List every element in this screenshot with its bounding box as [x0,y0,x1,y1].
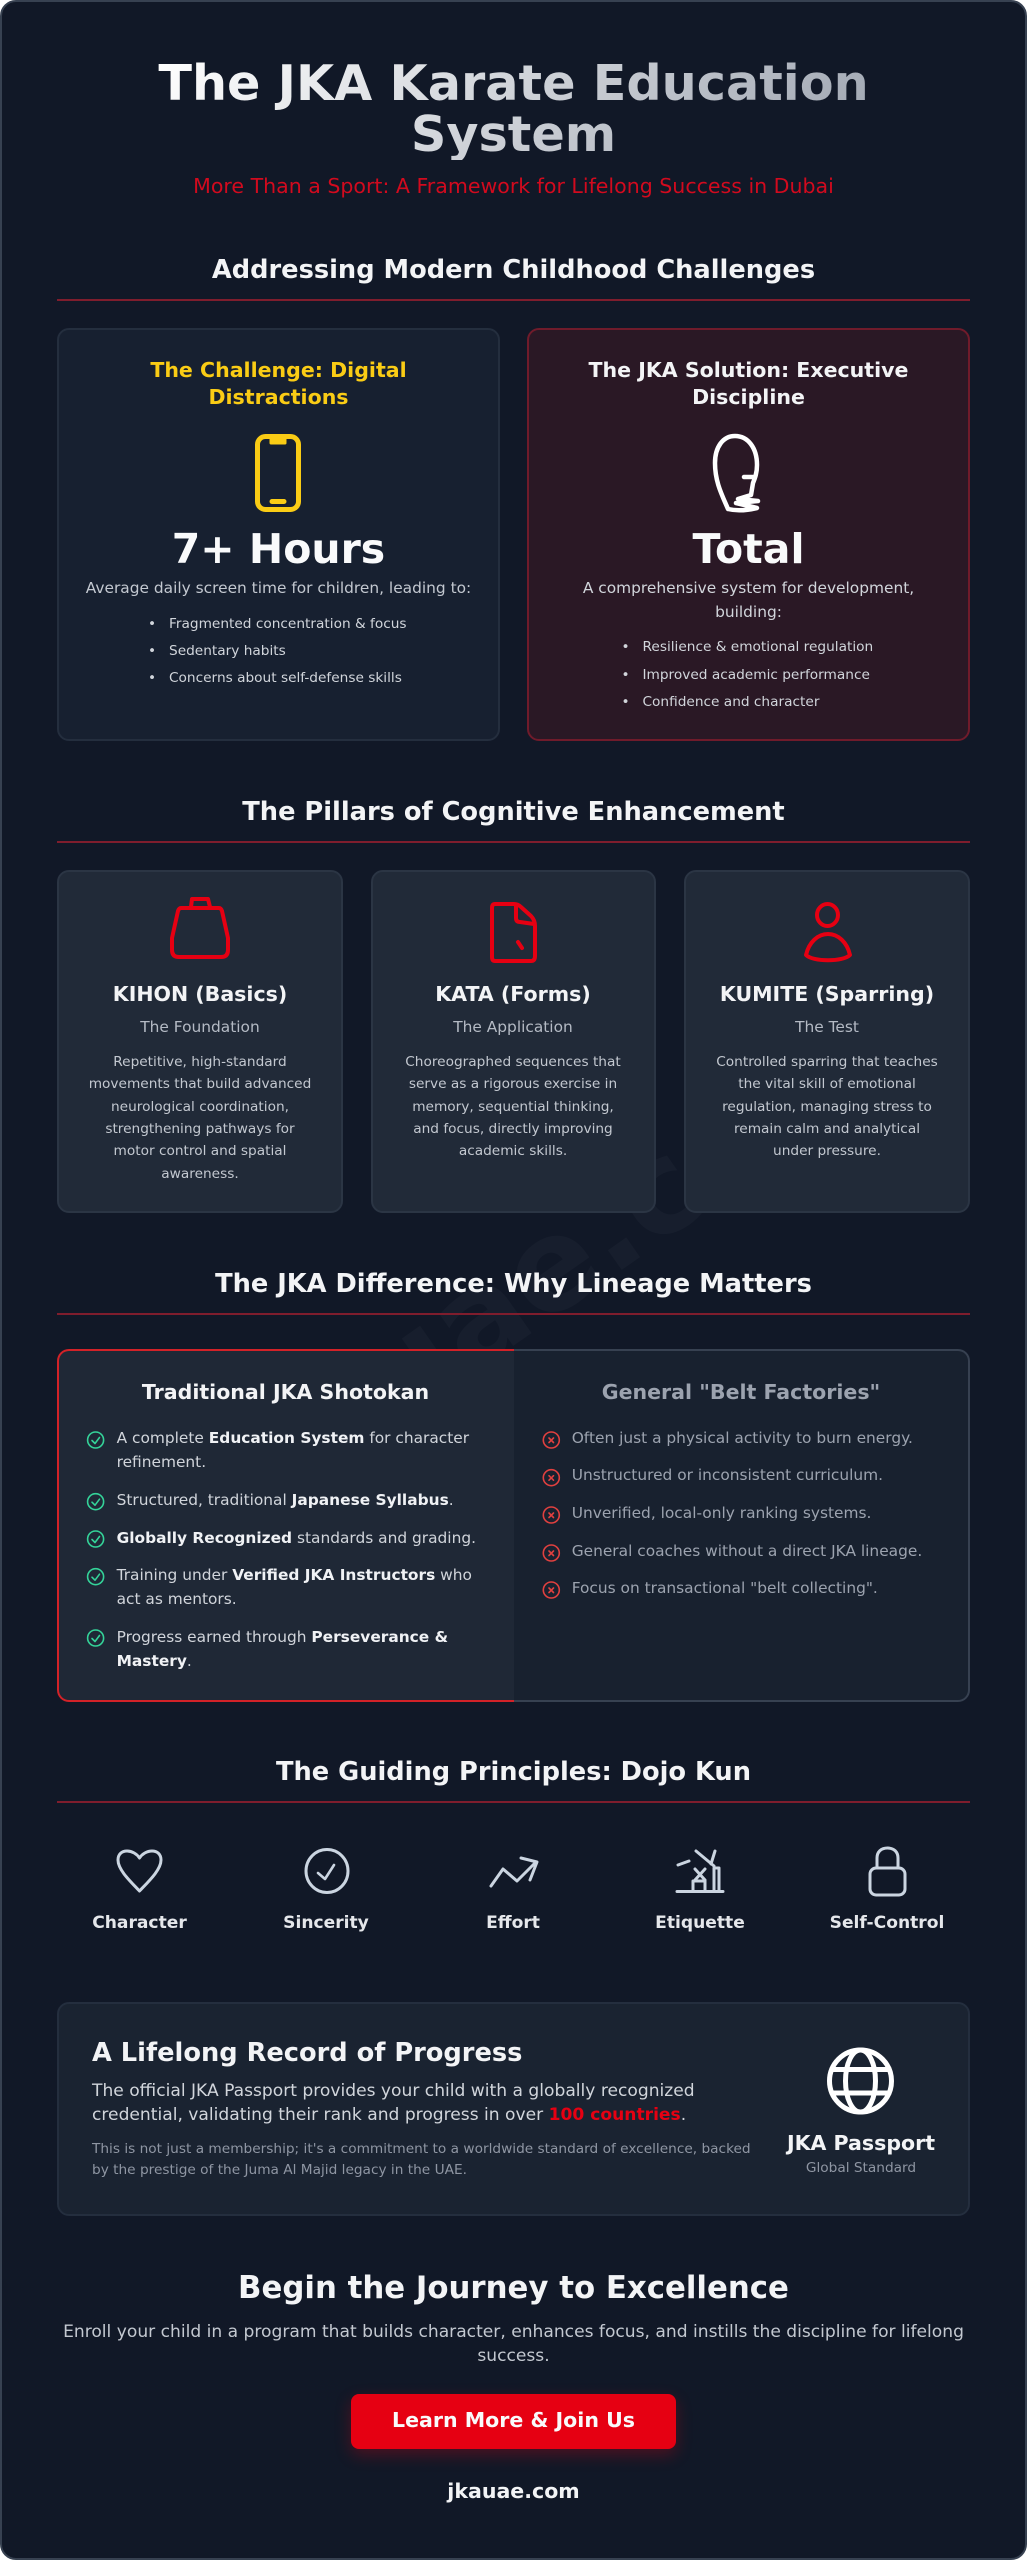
challenge list: Sedentary habits [169,643,286,659]
panel: kihon [57,870,343,1213]
solution list [624,639,873,710]
cta button: Learn More & Join Us [392,2408,635,2432]
solution description [583,578,914,621]
heading: dojo kun: The Guiding Principles: Dojo Kun [276,1757,751,1787]
heading: pillars: The Pillars of Cognitive Enhancement [242,797,785,827]
challenge list [150,616,407,686]
heading: difference: The JKA Difference: Why Lineage Matters [215,1269,812,1299]
passport heading: A Lifelong Record of Progress [92,2038,522,2068]
kihon text: motor control and spatial [114,1143,286,1159]
solution description: A comprehensive system for development, [583,578,914,596]
panel: belt factories column [513,1349,970,1702]
traditional list: A complete Education System for character [117,1429,469,1447]
item: curriculum: Unstructured or inconsistent curriculum. [572,1466,883,1484]
kata text: memory, sequential thinking, [412,1099,614,1115]
solution list: Confidence and character [642,694,819,710]
kihon subtitle: The Foundation [140,1018,260,1036]
cta text: Enroll your child in a program that builds character, enhances focus, and instills the discipline for lifelong [63,2322,964,2342]
item: syllabus: Structured, traditional Japanese Syllabus. [117,1491,454,1509]
passport text: The official JKA Passport provides your child with a globally recognized [92,2080,695,2100]
item: coaches: General coaches without a direct JKA lineage. [572,1542,922,1560]
passport note: This is not just a membership; it's a commitment to a worldwide standard of excellence, backed [92,2141,751,2157]
panel: kata [370,870,656,1213]
belt factories list: Often just a physical activity to burn energy. [572,1429,913,1447]
title: The JKA Karate Education [158,54,869,112]
item: instructors: Training under Verified JKA Instructors who [117,1566,472,1584]
label: character: Character [92,1913,187,1933]
kumite text: remain calm and analytical [734,1121,920,1137]
solution list: Resilience & emotional regulation [642,639,873,655]
heading: challenges: Addressing Modern Childhood Challenges [212,255,815,285]
kata text: academic skills. [459,1143,567,1159]
solution heading: The JKA Solution: Executive [589,358,908,382]
item: instructors [116,1566,472,1608]
kihon text: strengthening pathways for [105,1121,295,1137]
challenge heading: The Challenge: Digital [150,358,407,382]
item: ranking: Unverified, local-only ranking systems. [572,1504,871,1522]
kata text: Choreographed sequences that [405,1054,621,1070]
solution list: Improved academic performance [642,667,870,683]
kumite title: KUMITE (Sparring) [720,982,934,1006]
website link: jkauae.com [447,2478,580,2502]
stat: total: Total [692,525,804,573]
traditional heading: Traditional JKA Shotokan [142,1380,429,1404]
traditional list [116,1429,470,1471]
panel: kumite [684,870,970,1213]
solution description: building: [715,603,782,621]
item: recognized: Globally Recognized standards and grading. [117,1529,476,1547]
kihon text: Repetitive, high-standard [113,1054,287,1070]
kihon text [89,1054,311,1182]
title [158,54,869,162]
challenge list: Concerns about self-defense skills [169,670,402,686]
watermark: jkauae.com [150,983,912,1578]
kumite text: Controlled sparring that teaches [716,1054,938,1070]
traditional list: refinement. [117,1453,206,1471]
kihon text: awareness. [161,1166,239,1182]
challenge list: Fragmented concentration & focus [169,616,407,632]
stat: 7+ hours: 7+ Hours [172,525,385,573]
challenge description: Average daily screen time for children, leading to: [86,578,471,596]
challenge heading [150,358,407,409]
kumite text [716,1054,938,1159]
kihon title: KIHON (Basics) [113,982,287,1006]
kumite text: regulation, managing stress to [722,1099,932,1115]
kihon text: movements that build advanced [89,1076,311,1092]
item: perseverance: Progress earned through Perseverance & [117,1628,448,1646]
panel: the challenge [57,328,500,741]
kata text: serve as a rigorous exercise in [409,1076,617,1092]
kata text: and focus, directly improving [413,1121,613,1137]
kumite subtitle: The Test [795,1018,859,1036]
kata text [405,1054,621,1159]
passport text [92,2080,695,2124]
panel: the solution [527,328,970,741]
item: perseverance [117,1628,448,1670]
label: sincerity: Sincerity [283,1913,369,1933]
panel: passport [57,2002,970,2216]
kata title: KATA (Forms) [435,982,591,1006]
cta text: success. [477,2346,550,2366]
title: System [411,104,616,162]
solution heading: Discipline [692,385,805,409]
label: etiquette: Etiquette [655,1913,745,1933]
challenge heading: Distractions [208,385,349,409]
passport badge title: JKA Passport [787,2131,935,2155]
passport badge subtitle: Global Standard [806,2160,916,2176]
passport text: credential, validating their rank and progress in over 100 countries. [92,2104,686,2124]
panel: traditional column [57,1349,514,1702]
subtitle: More Than a Sport: A Framework for Lifelong Success in Dubai [193,174,834,198]
kihon text: neurological coordination, [111,1099,289,1115]
passport note: by the prestige of the Juma Al Majid legacy in the UAE. [92,2162,467,2178]
item: belt collecting: Focus on transactional "belt collecting". [572,1579,878,1597]
kumite text: the vital skill of emotional [738,1076,916,1092]
passport note [92,2141,751,2178]
kata subtitle: The Application [453,1018,573,1036]
cta text [63,2322,964,2366]
cta heading: Begin the Journey to Excellence [238,2270,789,2306]
label: effort: Effort [486,1913,540,1933]
solution heading [588,358,908,409]
item: instructors: act as mentors. [117,1590,237,1608]
label: self-control: Self-Control [830,1913,944,1933]
kumite text: under pressure. [773,1143,881,1159]
item: perseverance: Mastery. [117,1652,192,1670]
belt factories heading: General "Belt Factories" [602,1380,880,1404]
cta button [351,2394,676,2449]
